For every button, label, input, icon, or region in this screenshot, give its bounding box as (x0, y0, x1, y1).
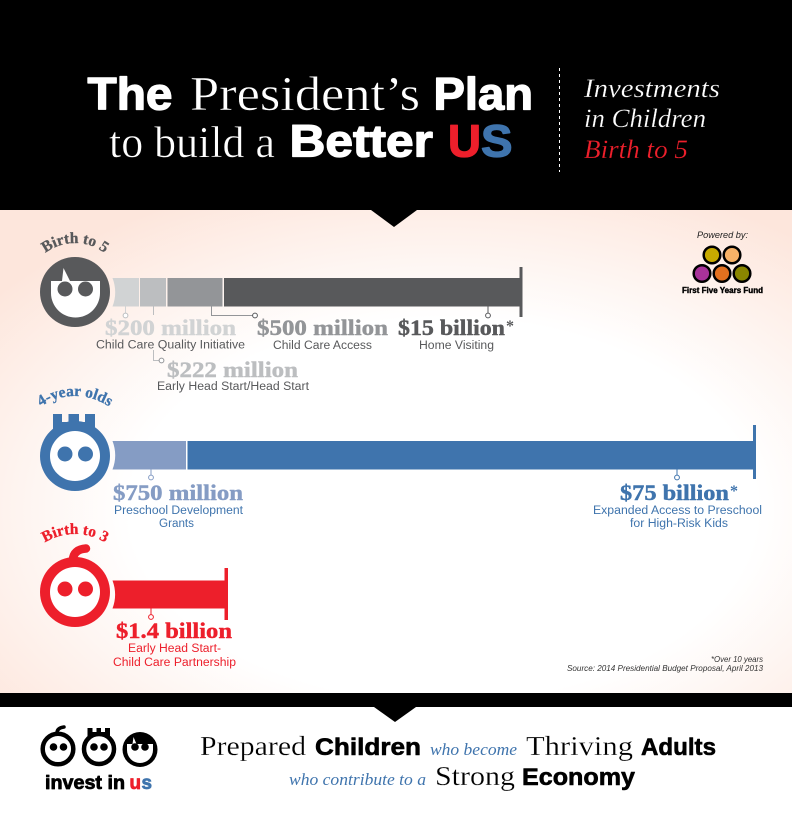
callout: $500 million: $500 million (257, 315, 389, 340)
logo: First Five Years Fund: First Five Years Fund (682, 286, 763, 295)
callout: $200 million (96, 306, 245, 352)
icon: face with hair (40, 257, 110, 327)
title: to build a (109, 118, 275, 167)
callout: $75 billion: $75 billion (620, 480, 730, 505)
bar chart: birth to 3 (112, 568, 228, 620)
logo: invest in us (43, 727, 158, 794)
panel: header (0, 0, 792, 210)
callout: $200 million: $200 million (105, 315, 237, 340)
callout: $75 billion: for High-Risk Kids (630, 518, 728, 530)
subtitle: Investments (583, 74, 720, 103)
title: Plan (434, 68, 533, 120)
wordmark: invest in (45, 772, 125, 794)
bar chart: 4-year olds (112, 425, 756, 479)
tagline: Strong (435, 761, 515, 791)
callout: $500 million: Child Care Access (273, 340, 372, 352)
label: Birth to 5: Birth to 5 (40, 232, 110, 253)
callout: $750 million: Grants (159, 518, 194, 530)
icon: curl face (43, 727, 73, 764)
title (88, 66, 533, 167)
callout: $75 billion: Expanded Access to Preschool (593, 505, 762, 517)
tagline: Adults (641, 734, 716, 761)
callout: $1.4 billion: $1.4 billion (116, 618, 233, 643)
icon: face with crown (40, 414, 110, 491)
bar chart: birth to 5 (112, 267, 522, 317)
title: The (88, 68, 172, 120)
icon: hair face (122, 732, 158, 767)
panel: footer band (0, 693, 792, 707)
callout: $75 billion: * (730, 483, 738, 500)
panel: investments background (0, 210, 792, 693)
subtitle: in Children (584, 104, 706, 133)
footnote: *Over 10 years (711, 655, 763, 664)
icon: face with curl (40, 548, 110, 627)
footnote (567, 655, 764, 673)
callout: $75 billion (593, 469, 762, 530)
callout: $1.4 billion: Child Care Partnership (113, 657, 236, 669)
callout: $15 billion: Home Visiting (419, 340, 494, 352)
tagline: Economy (522, 764, 636, 791)
callout: $750 million: Preschool Development (114, 505, 244, 517)
callout: $1.4 billion: Early Head Start- (128, 643, 221, 655)
callout: $222 million: Early Head Start/Head Start (157, 381, 310, 393)
tagline: who contribute to a (289, 770, 426, 789)
callout: $500 million (212, 306, 389, 352)
label: 4-year olds: 4-year olds (39, 388, 112, 406)
tagline: Thriving (526, 731, 633, 761)
group: birth to 5 (40, 232, 522, 393)
callout: $1.4 billion (113, 608, 236, 669)
title: President’s (190, 66, 420, 121)
group: 4-year olds (39, 388, 762, 530)
arrow: header pointer (371, 210, 417, 227)
logo: First Five Years Fund (682, 230, 763, 295)
title: U (448, 116, 481, 166)
callout: $15 billion (398, 306, 514, 352)
arrow: footer pointer (374, 707, 416, 722)
subtitle (583, 74, 720, 164)
tagline: who become (430, 740, 517, 759)
callout: $222 million: $222 million (167, 357, 299, 382)
wordmark: u (130, 772, 141, 794)
tagline: Prepared (200, 731, 307, 761)
icon: crown face (84, 728, 114, 764)
callout: $222 million (154, 306, 310, 393)
tagline: Children (315, 734, 421, 761)
label: Birth to 3: Birth to 3 (40, 523, 108, 542)
group: birth to 3 (40, 523, 236, 669)
footnote: Source: 2014 Presidential Budget Proposal, April 2013 (567, 664, 764, 673)
title: Better (290, 116, 433, 166)
subtitle: Birth to 5 (584, 135, 688, 164)
callout: $15 billion: $15 billion (398, 315, 506, 340)
callout: $750 million (113, 469, 244, 530)
title: S (481, 116, 512, 166)
logo: First Five Years Fund: Powered by: (697, 230, 749, 240)
callout: $750 million: $750 million (113, 480, 244, 505)
tagline (200, 731, 716, 791)
wordmark: s (142, 772, 152, 794)
callout: $15 billion: * (506, 318, 514, 335)
callout: $200 million: Child Care Quality Initiative (96, 340, 245, 352)
